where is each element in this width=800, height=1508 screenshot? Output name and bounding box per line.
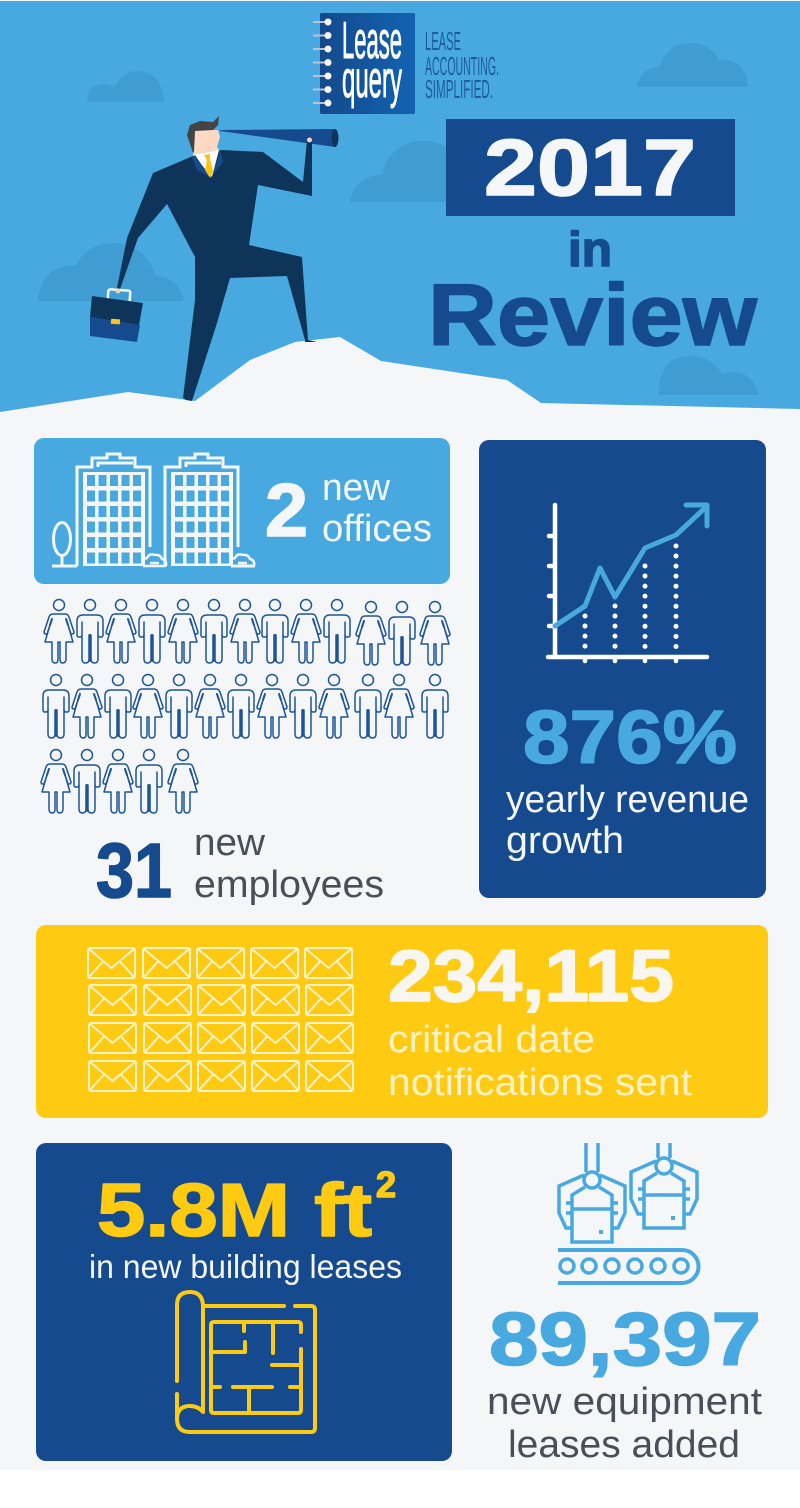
logo: Lease: [342, 10, 402, 70]
equipment leases label: new equipment: [487, 1381, 762, 1423]
people pictogram: 31 employees: [41, 600, 450, 813]
revenue number: 876%: [523, 695, 737, 779]
offices label: offices: [322, 508, 432, 550]
equipment leases label: [487, 1381, 762, 1466]
envelope grid: [88, 948, 353, 1091]
title box: 2017: 2017: [484, 123, 696, 212]
line chart icon: [548, 505, 707, 661]
offices label: [322, 467, 432, 550]
title: Review: Review: [428, 267, 757, 364]
logo: query: [342, 49, 402, 109]
employees label: new: [194, 822, 266, 864]
offices label: new: [322, 467, 391, 509]
employees number: 31: [96, 828, 172, 914]
notifications number: 234,115: [388, 936, 674, 1017]
building leases number: 5.8M ft: [97, 1168, 372, 1252]
logo: [313, 10, 499, 114]
equipment leases label: leases added: [508, 1424, 740, 1466]
logo: SIMPLIFIED.: [425, 75, 493, 104]
header sky: [0, 1, 800, 412]
employees label: employees: [194, 864, 384, 906]
icon: floor plan: [177, 1292, 315, 1432]
panel: revenue growth: [479, 440, 766, 898]
revenue label: growth: [506, 820, 624, 862]
logo: LEASE: [425, 27, 461, 56]
icon: robotic arms and conveyor: [558, 1143, 699, 1283]
employees label: [194, 822, 384, 906]
building leases label: in new building leases: [89, 1248, 402, 1285]
superscript: 2: [376, 1164, 396, 1205]
notifications label: notifications sent: [388, 1062, 692, 1104]
offices number: 2: [265, 468, 308, 552]
clouds: [38, 43, 758, 395]
revenue label: yearly revenue: [506, 779, 749, 821]
logo: ACCOUNTING.: [425, 52, 499, 81]
briefcase: [90, 288, 143, 342]
notifications label: [388, 1019, 692, 1104]
title: in: in: [568, 223, 612, 277]
panel: building leases: [36, 1143, 452, 1461]
revenue label: [506, 779, 749, 862]
title box: 2017: [446, 119, 735, 216]
businessman with telescope: [117, 116, 338, 401]
panel: notifications: [36, 925, 768, 1118]
panel: new offices: [34, 438, 450, 584]
equipment leases number: 89,397: [489, 1297, 761, 1381]
icon: office buildings: [52, 454, 255, 566]
notifications label: critical date: [388, 1019, 595, 1061]
